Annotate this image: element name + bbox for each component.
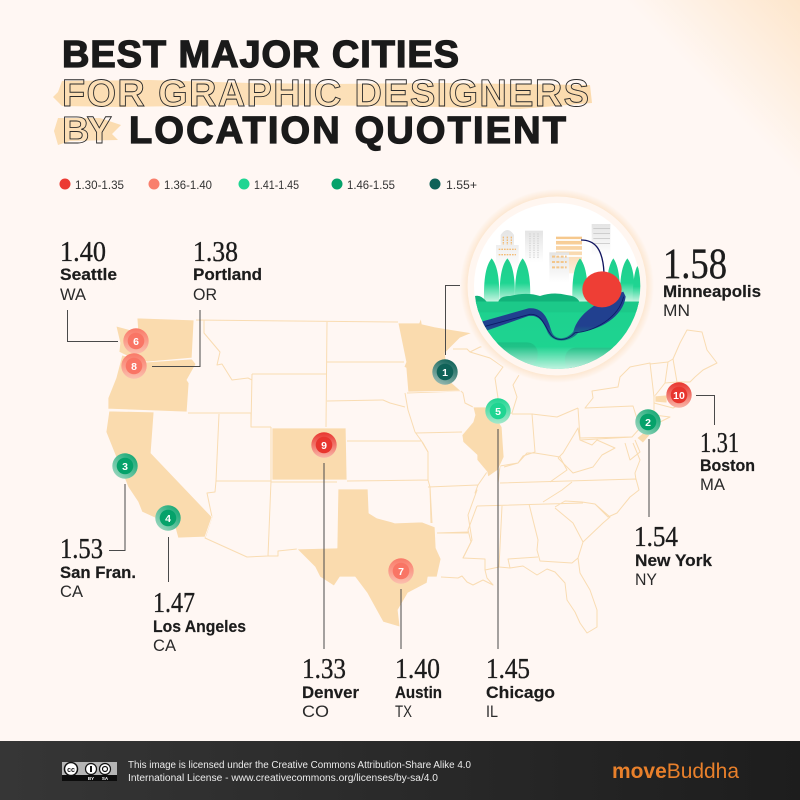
pin 5: 5 — [495, 406, 501, 418]
legend: 1.41-1.45 — [254, 178, 299, 192]
license text — [128, 760, 471, 784]
label: New York: New York — [635, 552, 713, 570]
icon: creative commons badge — [62, 762, 117, 781]
label: Boston: Boston — [700, 457, 755, 475]
label: Boston: 1.31 — [700, 427, 739, 459]
pin 6 — [123, 328, 149, 354]
pin 9: 9 — [321, 440, 327, 452]
pin 4 — [155, 505, 181, 531]
label: Seattle: 1.40 — [60, 236, 106, 268]
license text: International License - www.creativecommons.org/licenses/by-sa/4.0 — [128, 773, 438, 784]
label: Minneapolis: MN — [663, 301, 690, 320]
label: Portland — [193, 236, 262, 304]
label: Denver: 1.33 — [302, 653, 346, 685]
title: FOR GRAPHIC DESIGNERS — [62, 73, 589, 115]
label: New York — [634, 521, 713, 589]
icon: creative commons badge: cc — [67, 767, 75, 774]
pin 10 — [666, 382, 692, 408]
label: New York: NY — [635, 570, 657, 589]
label: Los Angeles — [153, 587, 246, 655]
leader lines — [68, 286, 714, 649]
pin 8 — [121, 353, 147, 379]
illustration: Minneapolis scene — [460, 189, 654, 383]
label: Boston: MA — [700, 475, 726, 494]
legend: 1.36-1.40 — [164, 178, 212, 192]
label: Austin: 1.40 — [395, 653, 440, 685]
label: Denver: CO — [302, 702, 329, 721]
pin 7 — [388, 558, 414, 584]
label: San Fran.: CA — [60, 582, 84, 601]
label: Chicago — [486, 653, 555, 721]
label: San Fran.: 1.53 — [60, 533, 103, 565]
label: Seattle: WA — [60, 285, 87, 304]
title — [53, 34, 592, 152]
icon: creative commons badge: SA — [102, 776, 109, 781]
license text: This image is licensed under the Creative Commons Attribution-Share Alike 4.0 — [128, 760, 471, 771]
label: Los Angeles: CA — [153, 636, 177, 655]
legend — [60, 178, 477, 192]
legend: 1.30-1.35 — [75, 178, 124, 192]
label: Los Angeles: Los Angeles — [153, 618, 246, 636]
title: BEST MAJOR CITIES — [62, 34, 459, 76]
pin 9 — [311, 432, 337, 458]
pin 1 — [432, 359, 458, 385]
pin 3 — [112, 453, 138, 479]
pin 6: 6 — [133, 336, 139, 348]
label: San Fran.: San Fran. — [60, 564, 136, 582]
label: Austin: TX — [395, 702, 412, 721]
label: Chicago: 1.45 — [486, 653, 530, 685]
label: Minneapolis — [663, 241, 761, 320]
label: Minneapolis: 1.58 — [663, 241, 727, 288]
label: Denver — [302, 653, 360, 721]
label: Seattle: Seattle — [60, 266, 117, 284]
footer bar — [0, 741, 800, 800]
pin 5 — [485, 398, 511, 424]
label: Seattle — [60, 236, 117, 304]
pin 7: 7 — [398, 566, 404, 578]
pin 8: 8 — [131, 361, 137, 373]
pin 2: 2 — [645, 417, 651, 429]
legend: 1.46-1.55 — [347, 178, 395, 192]
label: Chicago: IL — [486, 702, 498, 721]
icon: creative commons badge: BY — [88, 776, 94, 781]
label: Boston — [700, 427, 755, 494]
label: Portland: 1.38 — [193, 236, 238, 268]
label: New York: 1.54 — [634, 521, 678, 553]
label: Los Angeles: 1.47 — [153, 587, 195, 619]
label: Austin — [395, 653, 442, 721]
title: LOCATION QUOTIENT — [129, 110, 566, 152]
pin 4: 4 — [165, 513, 171, 525]
label: Portland: Portland — [193, 266, 262, 284]
label: Austin: Austin — [395, 684, 442, 702]
moveBuddha logo: moveBuddha — [612, 760, 739, 783]
legend: 1.55+ — [446, 178, 477, 192]
label: Chicago: Chicago — [486, 684, 555, 702]
label: San Fran. — [60, 533, 136, 601]
label: Portland: OR — [193, 285, 217, 304]
pin 10: 10 — [673, 390, 685, 402]
label: Denver: Denver — [302, 684, 360, 702]
label: Minneapolis: Minneapolis — [663, 283, 761, 301]
pin 2 — [635, 409, 661, 435]
pin 1: 1 — [442, 367, 448, 379]
title: BY — [62, 110, 112, 152]
pin 3: 3 — [122, 461, 128, 473]
US map — [106, 318, 717, 633]
